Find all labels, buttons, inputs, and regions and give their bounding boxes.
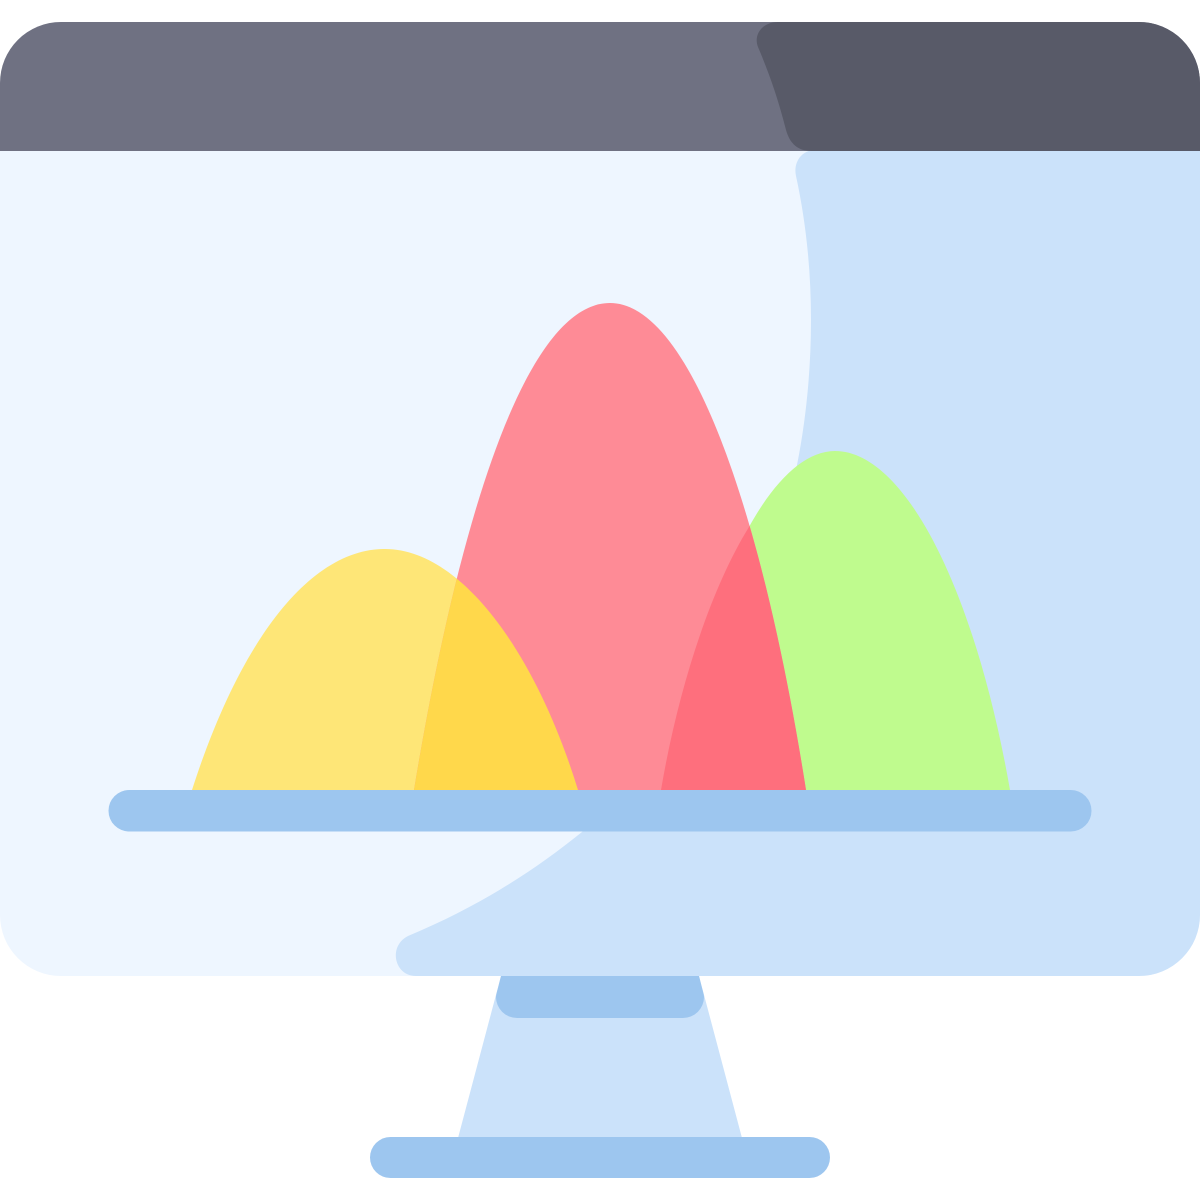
- curve: green: [661, 451, 1010, 790]
- curve: yellow: [192, 549, 578, 790]
- monitor title bar: [0, 22, 1200, 151]
- screen shaded area: [396, 150, 1200, 976]
- title bar shaded area: [757, 22, 1200, 151]
- overlap: yellow and red: [414, 578, 578, 790]
- curve: red: [414, 303, 806, 790]
- stand neck shadow: [496, 976, 704, 1018]
- monitor stand neck: [458, 976, 742, 1138]
- overlap: red and green: [661, 526, 806, 790]
- chart baseline: [108, 790, 1092, 832]
- monitor screen: [0, 150, 1200, 976]
- chart curves: [192, 303, 1010, 790]
- stand base: [370, 1137, 830, 1178]
